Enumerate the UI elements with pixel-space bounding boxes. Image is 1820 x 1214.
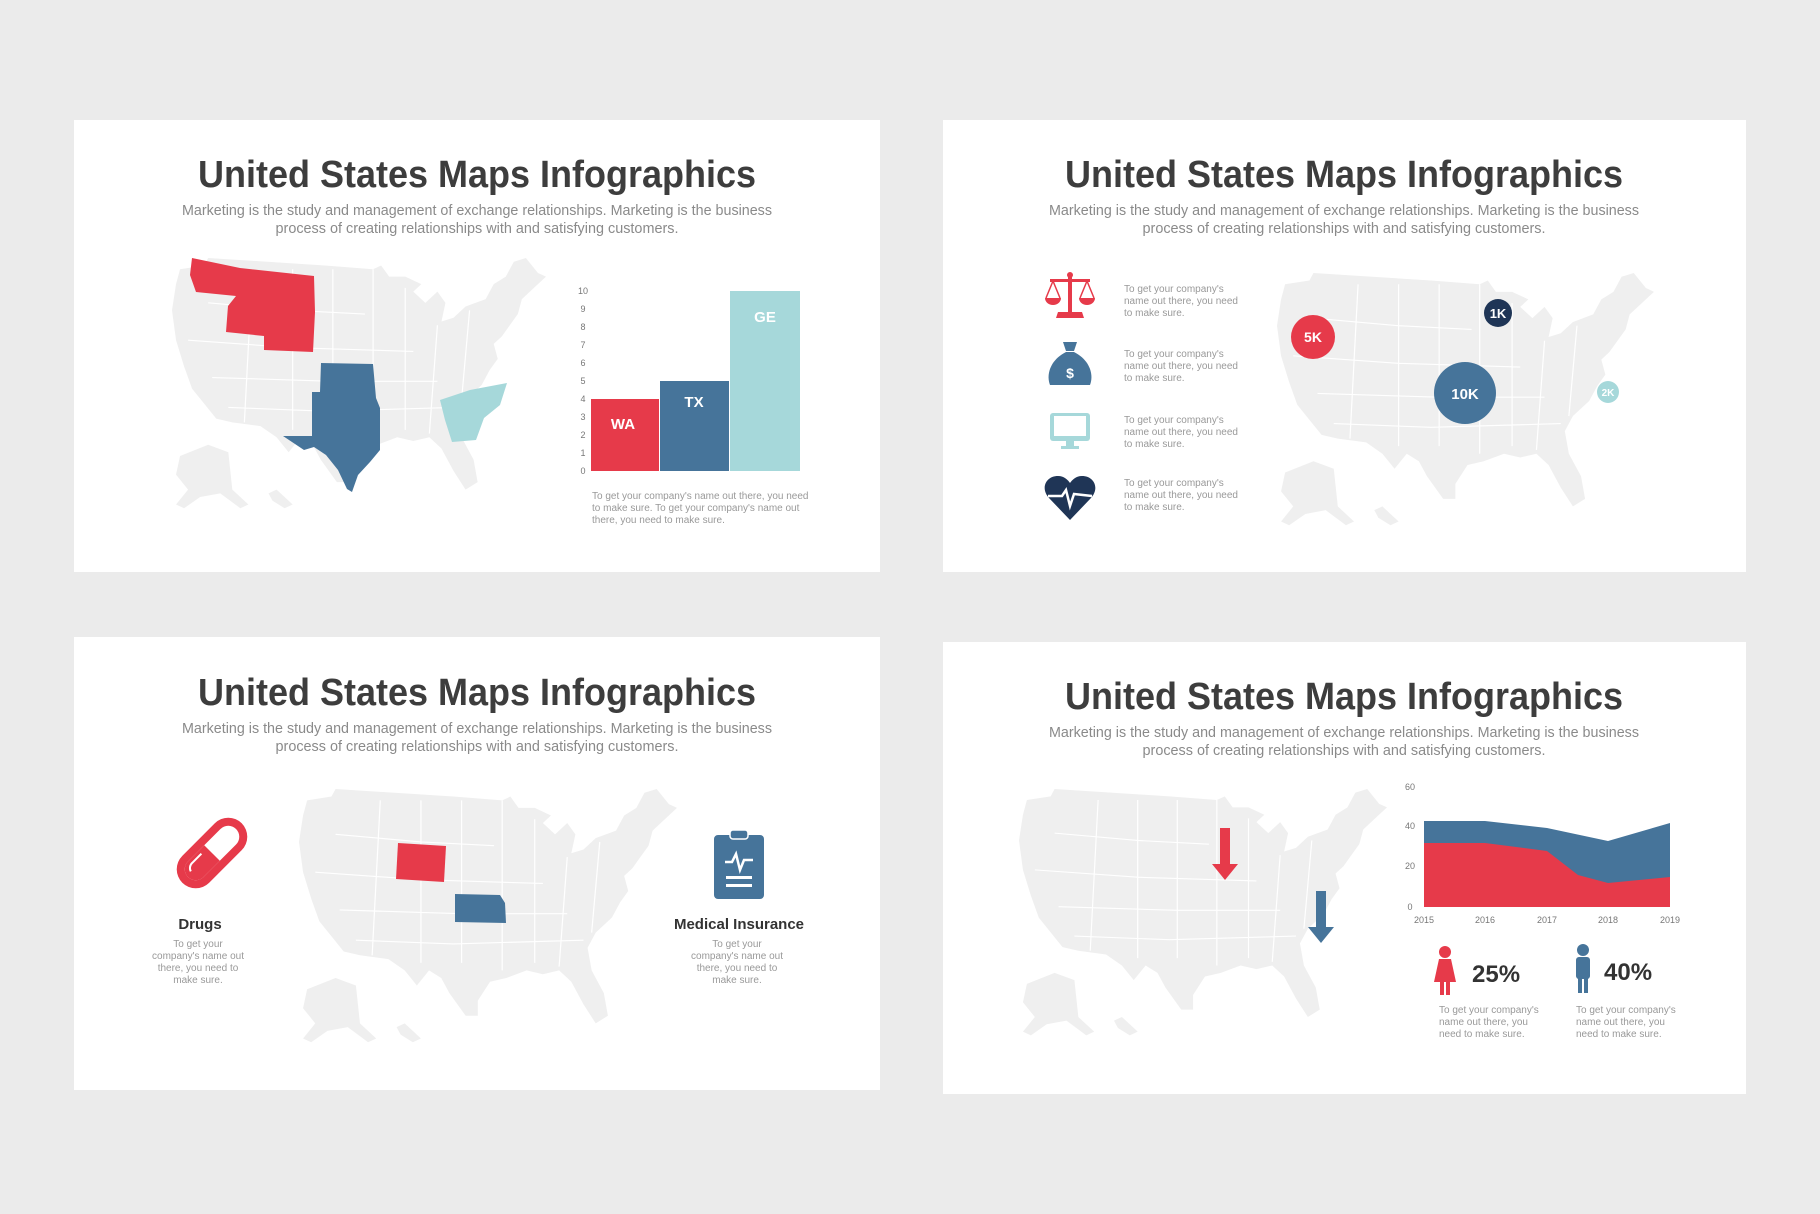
- bar chart: 0: [580, 466, 586, 476]
- area chart: 40: [1405, 821, 1415, 831]
- bar chart: WA: [611, 416, 635, 433]
- title: United States Maps Infographics: [198, 672, 756, 714]
- medical insurance label: company's name out: [691, 951, 783, 962]
- subtitle: process of creating relationships with and satisfying customers.: [1142, 742, 1546, 759]
- people texts: name out there, you: [1576, 1017, 1665, 1028]
- drugs label: company's name out: [152, 951, 244, 962]
- icon: monitor: [1050, 413, 1090, 449]
- icon: scales: [1045, 272, 1095, 318]
- area chart: 20: [1405, 861, 1415, 871]
- icon: money bag: $: [1066, 365, 1074, 381]
- panel: area chart and people: [943, 642, 1746, 1094]
- title: United States Maps Infographics: [1065, 676, 1623, 718]
- arrow: red: [1212, 828, 1238, 880]
- drugs label: [152, 916, 244, 986]
- people texts: To get your company's: [1576, 1005, 1676, 1016]
- subtitle: [182, 720, 772, 755]
- area chart: 2015: [1414, 915, 1434, 925]
- stat: 25%: 25%: [1472, 961, 1520, 988]
- bar caption: there, you need to make sure.: [592, 515, 725, 526]
- medical insurance label: there, you need to: [697, 963, 778, 974]
- title: United States Maps Infographics: [198, 154, 756, 196]
- drugs label: To get your: [173, 939, 223, 950]
- icon texts: to make sure.: [1124, 373, 1185, 384]
- bar chart: 7: [580, 340, 586, 350]
- icon texts: To get your company's: [1124, 284, 1224, 295]
- bar chart: 10: [578, 286, 588, 296]
- icon texts: To get your company's: [1124, 415, 1224, 426]
- icon: heart pulse: [1045, 476, 1095, 520]
- icon texts: To get your company's: [1124, 349, 1224, 360]
- subtitle: process of creating relationships with and satisfying customers.: [276, 220, 678, 237]
- subtitle: process of creating relationships with and satisfying customers.: [1142, 220, 1546, 237]
- subtitle: Marketing is the study and management of exchange relationships. Marketing is the business: [1049, 202, 1639, 219]
- people texts: need to make sure.: [1576, 1029, 1662, 1040]
- icon: money bag: [1049, 342, 1091, 385]
- bar caption: To get your company's name out there, you need: [592, 491, 808, 502]
- bar chart: 3: [580, 412, 586, 422]
- icon texts: name out there, you need: [1124, 427, 1238, 438]
- drugs label: there, you need to: [158, 963, 239, 974]
- bar chart: 2: [580, 430, 586, 440]
- drugs label: Drugs: [178, 916, 222, 933]
- icon: male: [1576, 944, 1590, 993]
- map with bubbles: [1277, 273, 1654, 525]
- bar caption: to make sure. To get your company's name out: [592, 503, 800, 514]
- icon texts: To get your company's: [1124, 478, 1224, 489]
- bar chart: [578, 286, 800, 476]
- icon texts: to make sure.: [1124, 502, 1185, 513]
- map with highlighted states: [299, 789, 677, 1042]
- subtitle: [1049, 202, 1639, 237]
- people texts: need to make sure.: [1439, 1029, 1525, 1040]
- map with bubbles: 5K: [1304, 329, 1322, 345]
- subtitle: Marketing is the study and management of exchange relationships. Marketing is the business: [1049, 724, 1639, 741]
- bar caption: [592, 491, 808, 526]
- medical insurance label: To get your: [712, 939, 762, 950]
- area chart: 2016: [1475, 915, 1495, 925]
- subtitle: [1049, 724, 1639, 759]
- bar chart: GE: [754, 309, 776, 326]
- subtitle: process of creating relationships with and satisfying customers.: [276, 738, 678, 755]
- map with arrows: [1019, 789, 1387, 1035]
- area chart: 2019: [1660, 915, 1680, 925]
- bar chart: TX: [684, 394, 704, 411]
- subtitle: [182, 202, 772, 237]
- bar chart: 4: [580, 394, 586, 404]
- subtitle: Marketing is the study and management of exchange relationships. Marketing is the business: [182, 720, 772, 737]
- bar chart: 9: [580, 304, 586, 314]
- medical insurance label: Medical Insurance: [674, 916, 804, 933]
- panel: bar chart map: [74, 120, 880, 572]
- panel: icons and bubbles: [943, 120, 1746, 572]
- stat: 40%: 40%: [1604, 959, 1652, 986]
- icon texts: [1124, 284, 1238, 513]
- bar chart: 8: [580, 322, 586, 332]
- medical insurance label: make sure.: [712, 975, 762, 986]
- icon: pill: [169, 810, 255, 896]
- area chart: 2018: [1598, 915, 1618, 925]
- icon texts: name out there, you need: [1124, 361, 1238, 372]
- arrow: blue: [1308, 891, 1334, 943]
- map with highlighted states: [172, 258, 546, 508]
- area chart: 0: [1407, 902, 1413, 912]
- bar chart: 5: [580, 376, 586, 386]
- icon texts: to make sure.: [1124, 439, 1185, 450]
- drugs label: make sure.: [173, 975, 223, 986]
- people texts: To get your company's: [1439, 1005, 1539, 1016]
- area chart: 60: [1405, 782, 1415, 792]
- icon texts: name out there, you need: [1124, 296, 1238, 307]
- icon texts: name out there, you need: [1124, 490, 1238, 501]
- icon: clipboard: [714, 830, 764, 899]
- panel: drugs and insurance: [74, 637, 880, 1090]
- medical insurance label: [674, 916, 804, 986]
- subtitle: Marketing is the study and management of exchange relationships. Marketing is the business: [182, 202, 772, 219]
- icon texts: to make sure.: [1124, 308, 1185, 319]
- area chart: 2017: [1537, 915, 1557, 925]
- map with bubbles: 1K: [1490, 306, 1507, 321]
- area chart: [1405, 782, 1680, 925]
- map with bubbles: 10K: [1451, 386, 1479, 403]
- people texts: [1439, 1005, 1676, 1040]
- bar chart: 1: [580, 448, 586, 458]
- map with bubbles: 2K: [1602, 388, 1615, 399]
- people texts: name out there, you: [1439, 1017, 1528, 1028]
- bar chart: 6: [580, 358, 586, 368]
- icon: female: [1434, 946, 1456, 995]
- title: United States Maps Infographics: [1065, 154, 1623, 196]
